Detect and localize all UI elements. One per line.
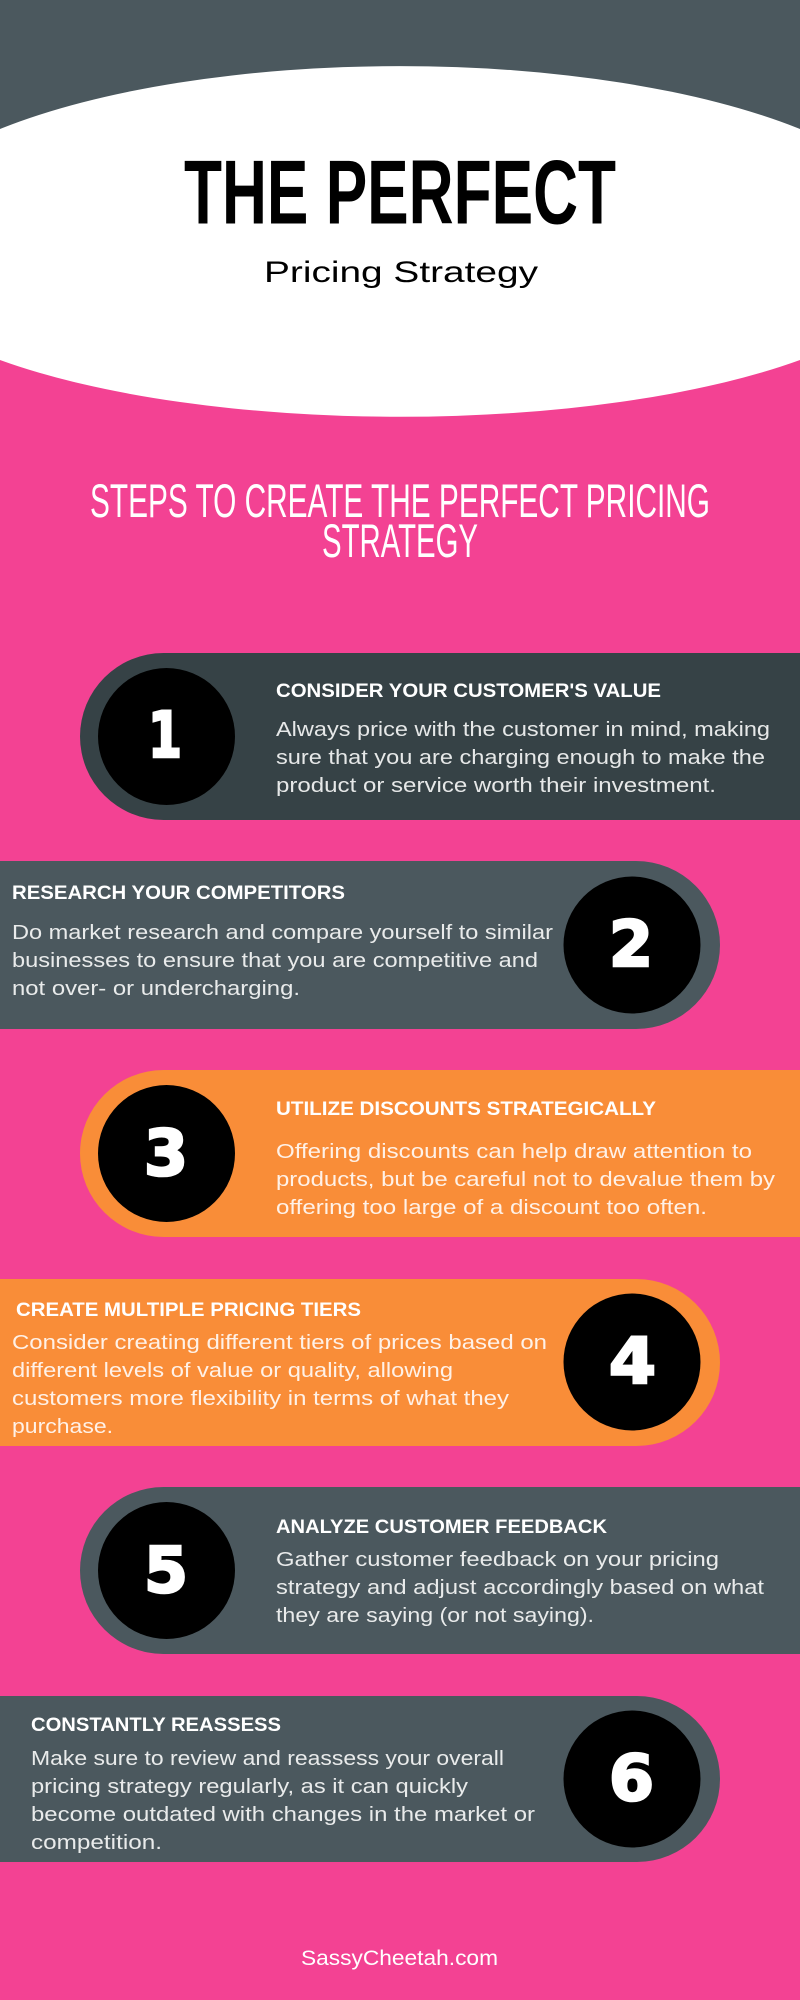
body: step 3: offering too large of a discount too often. (276, 1196, 707, 1219)
footer website: SassyCheetah.com (301, 1947, 498, 1970)
panel: step 6 (0, 1696, 720, 1862)
body: step 3 (276, 1140, 776, 1219)
white curved header (0, 66, 800, 417)
heading: step 1: CONSIDER YOUR CUSTOMER'S VALUE (276, 680, 661, 702)
body: step 2: not over- or undercharging. (12, 977, 300, 1000)
panel: step 5 (80, 1487, 800, 1654)
body: step 5: Gather customer feedback on your pricing (276, 1548, 719, 1571)
subtitle: Pricing Strategy (264, 256, 538, 289)
body: step 4: Consider creating different tiers of prices based on (12, 1331, 547, 1354)
heading: step 4: CREATE MULTIPLE PRICING TIERS (16, 1299, 361, 1321)
body: step 2: businesses to ensure that you are competitive and (12, 949, 538, 972)
body: step 3: products, but be careful not to devalue them by (276, 1168, 776, 1191)
body: step 2 (12, 921, 553, 1000)
body: step 1: Always price with the customer in mind, making (276, 718, 770, 741)
body: step 6 (31, 1747, 535, 1854)
number 4: 4 (609, 1325, 656, 1398)
section heading: STRATEGY (322, 514, 478, 567)
body: step 6: become outdated with changes in the market or (31, 1803, 535, 1826)
panel: step 2 (0, 861, 720, 1029)
body: step 4: different levels of value or quality, allowing (12, 1359, 453, 1382)
number 5: 5 (144, 1534, 188, 1607)
panel: step 1 (80, 653, 800, 820)
body: step 1 (276, 718, 770, 797)
body: step 5 (276, 1548, 764, 1627)
body: step 1: product or service worth their investment. (276, 774, 716, 797)
body: step 4: purchase. (12, 1415, 113, 1438)
number 2: 2 (609, 908, 653, 981)
title: THE PERFECT (184, 142, 616, 244)
body: step 1: sure that you are charging enough to make the (276, 746, 765, 769)
body: step 6: pricing strategy regularly, as it can quickly (31, 1775, 469, 1798)
number 6: 6 (609, 1742, 654, 1815)
top dark band (0, 0, 800, 240)
number 3: 3 (144, 1117, 188, 1190)
heading: step 2: RESEARCH YOUR COMPETITORS (12, 882, 345, 904)
heading: step 5: ANALYZE CUSTOMER FEEDBACK (276, 1516, 607, 1538)
body: step 2: Do market research and compare yourself to similar (12, 921, 553, 944)
body: step 4 (12, 1331, 547, 1438)
number 1: 1 (148, 699, 182, 772)
body: step 3: Offering discounts can help draw attention to (276, 1140, 752, 1163)
section heading (90, 474, 710, 567)
body: step 5: they are saying (or not saying). (276, 1604, 594, 1627)
body: step 6: competition. (31, 1831, 162, 1854)
body: step 6: Make sure to review and reassess your overall (31, 1747, 504, 1770)
body: step 4: customers more flexibility in terms of what they (12, 1387, 510, 1410)
heading: step 6: CONSTANTLY REASSESS (31, 1714, 281, 1736)
heading: step 3: UTILIZE DISCOUNTS STRATEGICALLY (276, 1098, 656, 1120)
panel: step 3 (80, 1070, 800, 1237)
panel: step 4 (0, 1279, 720, 1446)
body: step 5: strategy and adjust accordingly based on what (276, 1576, 764, 1599)
